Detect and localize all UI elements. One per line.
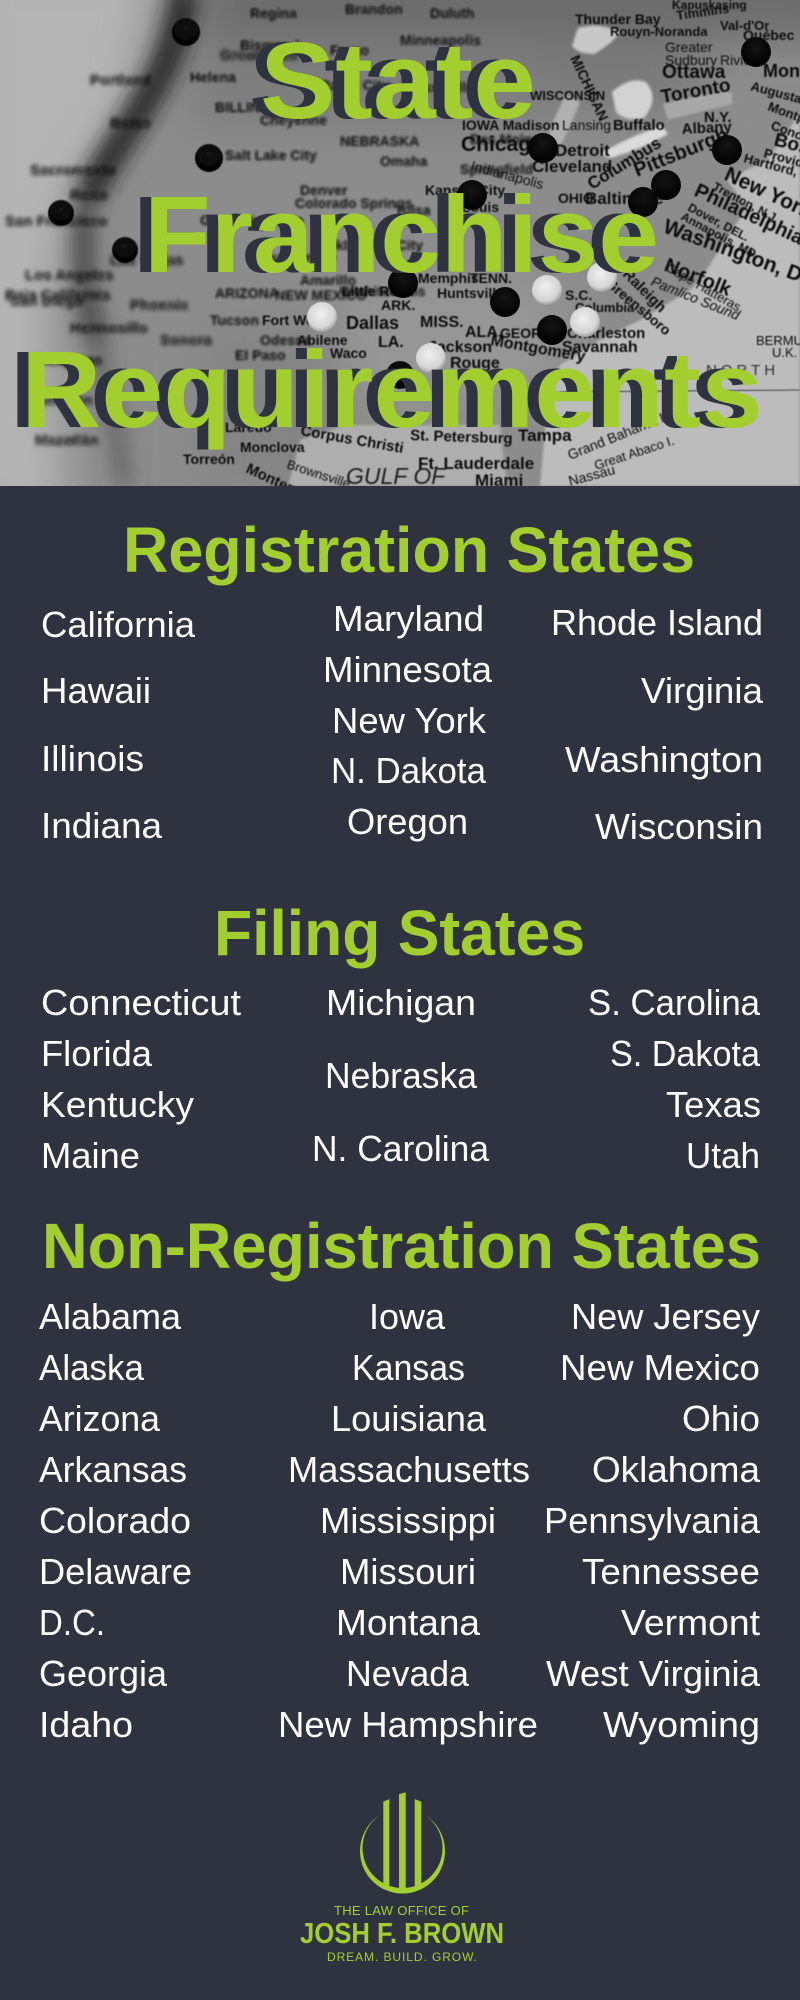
- list: non-registration middle column: Massachusetts: [288, 1449, 530, 1490]
- title: State: [249, 20, 525, 142]
- panel: header map photo: ARIZONA: [215, 285, 279, 301]
- map labels: mid: Great Abaco I.: [592, 433, 676, 473]
- panel: header map photo: Des Moines: [470, 131, 548, 147]
- title: Requirements: [10, 329, 752, 451]
- panel: filing states: [41, 897, 761, 1176]
- list: non-registration right column: Vermont: [621, 1602, 760, 1643]
- list: non-registration right column: Ohio: [682, 1398, 760, 1439]
- list: non-registration right column: New Jersey: [571, 1296, 760, 1337]
- map labels: sharp north-east: Annapolis, MD.: [679, 209, 762, 262]
- map labels: far blurred west: Sonora: [160, 332, 212, 349]
- panel: header map photo: Rapid City: [320, 77, 389, 93]
- map labels: sharp north-east: Greater: [665, 39, 713, 55]
- list: non-registration right column: New Mexico: [560, 1347, 760, 1388]
- list: registration right column: [551, 602, 764, 847]
- map labels: mid: U.K.: [772, 345, 797, 360]
- map labels: sharp north-east: Val-d'Or: [720, 18, 769, 33]
- list: non-registration right column: Pennsylvania: [544, 1500, 761, 1541]
- map labels: mid: Monclova: [240, 439, 305, 455]
- icon: circle with three towers: [360, 1792, 445, 1894]
- map labels: mid: Charleston: [567, 325, 645, 342]
- map labels: mid: Waco: [330, 345, 367, 361]
- list: non-registration left column: Georgia: [39, 1653, 168, 1694]
- map labels: far blurred west: Phoenix: [130, 297, 189, 314]
- list: non-registration middle column: Nevada: [346, 1653, 470, 1694]
- map labels: sharp north-east: Rouyn-Noranda: [610, 24, 708, 39]
- list: registration left column: Hawaii: [41, 670, 151, 711]
- panel: header map photo: Bismarck: [240, 37, 303, 53]
- map labels: sharp north-east: Lansing: [562, 117, 611, 133]
- list: filing left column: Connecticut: [41, 982, 241, 1023]
- list: filing right column: S. Dakota: [610, 1033, 761, 1074]
- map labels: sharp north-east: Québec: [743, 27, 795, 43]
- panel: header map photo: Helena: [190, 69, 236, 85]
- panel: header map photo: BILLINGS: [215, 99, 280, 115]
- map labels: mid: Chicago: [461, 133, 544, 156]
- list: non-registration left column: Idaho: [39, 1704, 133, 1745]
- panel: header map photo: Grand Junction: [200, 212, 303, 228]
- map labels: sharp north-east: Toronto: [659, 75, 732, 108]
- list: filing left column: Florida: [41, 1033, 153, 1074]
- map labels: mid: OHIO: [558, 190, 594, 206]
- map labels: far blurred west: Guaymas: [35, 352, 103, 369]
- map labels: mid: Grand Bahama I.: [565, 408, 670, 463]
- list: filing left column: Maine: [41, 1135, 140, 1176]
- map labels: sharp north-east: WISCONSIN: [530, 88, 605, 103]
- map labels: mid: Pamlico Sound: [649, 273, 743, 324]
- map labels: sharp north-east: Detroit: [555, 141, 610, 160]
- map labels: mid: [183, 117, 800, 507]
- map labels: far blurred west: Hermosillo: [70, 320, 148, 337]
- ocean and gulf: [288, 113, 800, 486]
- list: non-registration middle column: Iowa: [369, 1296, 446, 1337]
- map labels: mid: Miami: [475, 471, 523, 490]
- list: registration middle column: N. Dakota: [331, 750, 487, 791]
- map labels: far blurred west: Boise: [110, 115, 151, 132]
- list: registration right column: Wisconsin: [595, 806, 763, 847]
- map labels: mid: ARK.: [381, 297, 415, 313]
- map labels: mid: Greensboro: [603, 275, 674, 338]
- list: non-registration left column: Alaska: [39, 1347, 145, 1388]
- list: filing right column: Texas: [666, 1084, 761, 1125]
- map labels: mid: LA.: [378, 334, 404, 351]
- logo text: [300, 1903, 504, 1964]
- icon: black map pins: [48, 18, 771, 389]
- map labels: mid: Columbia: [575, 300, 635, 315]
- map labels: far blurred west: Baja California: [5, 287, 111, 304]
- map labels: sharp north-east: Cleveland: [532, 157, 612, 176]
- list: registration middle column: Oregon: [347, 801, 468, 842]
- list: registration right column: Virginia: [641, 670, 764, 711]
- list: filing middle column: Michigan: [326, 982, 476, 1023]
- logo text: DREAM. BUILD. GROW.: [327, 1950, 477, 1964]
- map labels: mid: Raleigh: [619, 266, 670, 316]
- map labels: sharp north-east: Sudbury: [665, 52, 717, 68]
- list: registration left column: Illinois: [41, 738, 144, 779]
- list: non-registration left column: Colorado: [39, 1500, 191, 1541]
- panel: header map photo: Colorado Springs: [295, 195, 413, 211]
- map labels: sharp north-east: Rivière: [720, 52, 764, 68]
- panel: header map photo: Duluth: [430, 5, 474, 21]
- map labels: mid: Little Rock: [342, 283, 414, 299]
- panel: header map photo: El Paso: [235, 347, 286, 363]
- panel: header map photo: Fargo: [330, 42, 369, 58]
- list: non-registration right column: West Virginia: [546, 1653, 761, 1694]
- list: registration left column: Indiana: [41, 805, 163, 846]
- panel: header map photo: NEW MEXICO: [275, 287, 367, 303]
- list: non-registration left column: Delaware: [39, 1551, 192, 1592]
- map labels: sharp north-east: [530, 0, 800, 301]
- map labels: far blurred west: San Francisco: [5, 213, 108, 230]
- list: non-registration middle column: [278, 1296, 538, 1745]
- map labels: mid: GULF OF: [346, 463, 447, 489]
- map labels: mid: Corpus Christi: [299, 422, 405, 457]
- map labels: sharp north-east: MICHIGAN: [567, 53, 612, 123]
- list: registration left column: California: [41, 604, 196, 645]
- list: non-registration left column: [39, 1296, 192, 1745]
- map labels: sharp north-east: Dover, DEL.: [686, 200, 752, 244]
- title: Franchise: [144, 174, 659, 296]
- list: filing middle column: N. Carolina: [312, 1128, 490, 1169]
- map labels: mid: Ft. Lauderdale: [418, 454, 534, 473]
- logo text: JOSH F. BROWN: [300, 1918, 504, 1950]
- list: non-registration left column: D.C.: [39, 1602, 105, 1643]
- map labels: sharp north-east: Columbus: [584, 133, 665, 193]
- list: registration middle column: New York: [332, 700, 487, 741]
- map labels: sharp north-east: Pittsburgh: [631, 124, 732, 182]
- panel: header map photo: Wichita Falls: [340, 283, 426, 299]
- map labels: far blurred west: Las Vegas: [110, 252, 183, 269]
- panel: header map photo: Oklahoma City: [325, 237, 423, 253]
- map labels: mid: IOWA Madison: [462, 117, 559, 133]
- panel: header map photo: Minneapolis: [400, 32, 481, 48]
- list: filing middle column: Nebraska: [325, 1055, 478, 1096]
- map labels: far blurred west: Portland: [90, 72, 151, 89]
- title: Requirements: [21, 329, 763, 451]
- map labels: mid: NORTH: [706, 362, 779, 379]
- map labels: mid: Kansas City: [425, 182, 505, 198]
- map labels: sharp north-east: Trenton, N.J.: [711, 179, 781, 226]
- map labels: far blurred west: Los Angeles: [25, 267, 114, 284]
- panel: header map photo: Cheyenne: [260, 112, 327, 128]
- panel: header map photo: Brandon: [345, 1, 403, 17]
- map labels: far blurred west: Sacramento: [30, 162, 116, 179]
- list: registration middle column: Minnesota: [323, 649, 493, 690]
- logo text: THE LAW OFFICE OF: [334, 1903, 469, 1918]
- map labels: far blurred west: San Diego: [10, 293, 83, 310]
- panel: header map photo: Albuquerque: [250, 249, 337, 265]
- map labels: mid: Laredo: [225, 419, 272, 435]
- map labels: mid: Montgomery: [489, 332, 587, 366]
- icon: white map pins: [307, 262, 617, 373]
- heading: filing states: Filing States: [214, 897, 585, 969]
- panel: header map photo: Sioux Falls: [400, 79, 474, 95]
- map labels: sharp north-east: Norfolk: [661, 254, 735, 301]
- list: filing right column: [588, 982, 761, 1176]
- panel: header map photo: Tucson: [210, 312, 259, 328]
- map labels: mid: St. Petersburg: [410, 427, 513, 448]
- list: non-registration right column: Oklahoma: [592, 1449, 761, 1490]
- list: non-registration middle column: Missouri: [340, 1551, 476, 1592]
- map labels: sharp north-east: Buffalo: [613, 117, 665, 134]
- panel: registration states: [41, 514, 764, 847]
- map labels: mid: Rouge: [450, 355, 500, 372]
- panel: non-registration states: [39, 1210, 761, 1745]
- list: filing right column: S. Carolina: [588, 982, 761, 1023]
- map labels: mid: Savannah: [562, 339, 638, 356]
- map labels: mid: Cape Hatteras: [664, 260, 744, 315]
- panel: header map photo: Denver: [300, 182, 348, 198]
- map labels: mid: Brownsville: [285, 457, 352, 491]
- map labels: mid: Nassau: [567, 461, 617, 489]
- list: non-registration middle column: Montana: [336, 1602, 481, 1643]
- panel: header map photo: Regina: [250, 5, 297, 21]
- list: filing left column: Kentucky: [41, 1084, 194, 1125]
- list: non-registration middle column: Louisiana: [331, 1398, 487, 1439]
- map labels: mid: Memphis: [418, 270, 479, 286]
- map labels: mid: Jackson: [428, 339, 492, 356]
- map labels: sharp north-east: Baltimore: [585, 189, 663, 208]
- map labels: far blurred west: [5, 47, 298, 449]
- map labels: far blurred west: Culiacán: [30, 392, 93, 409]
- list: non-registration right column: Tennessee: [582, 1551, 760, 1592]
- map labels: far blurred west: Mazatlán: [35, 432, 98, 449]
- map labels: mid: Huntsville: [437, 285, 504, 301]
- map labels: mid: Monterrey: [243, 460, 317, 507]
- map labels: mid: St. Louis: [440, 199, 499, 215]
- panel: header map photo: Amarillo: [300, 272, 356, 288]
- map labels: mid: ALA.: [465, 324, 502, 341]
- panel: header map photo: Springfield: [460, 161, 533, 177]
- list: non-registration right column: [544, 1296, 761, 1745]
- list: non-registration middle column: Mississippi: [320, 1500, 496, 1541]
- map labels: mid: MISS.: [420, 314, 464, 331]
- list: non-registration left column: Arkansas: [39, 1449, 187, 1490]
- map labels: mid: Dallas: [346, 313, 399, 333]
- list: registration left column: [41, 604, 196, 846]
- map labels: mid: GEORGIA: [500, 325, 566, 341]
- map labels: mid: TENN.: [470, 270, 512, 286]
- list: filing right column: Utah: [686, 1135, 760, 1176]
- map labels: sharp north-east: N.Y.: [704, 109, 732, 126]
- panel: header map photo: Odessa: [260, 332, 311, 348]
- list: non-registration right column: Wyoming: [603, 1704, 760, 1745]
- list: non-registration left column: Alabama: [39, 1296, 182, 1337]
- list: registration right column: Rhode Island: [551, 602, 763, 643]
- panel: header map photo: Omaha: [380, 153, 428, 169]
- title: [10, 20, 763, 451]
- map labels: mid: Torreón: [183, 451, 235, 467]
- heading: registration states: Registration States: [123, 514, 695, 586]
- map labels: mid: S.C.: [565, 287, 592, 303]
- list: non-registration middle column: New Hampshire: [278, 1704, 538, 1745]
- list: filing middle column: [312, 982, 490, 1169]
- map labels: sharp north-east: Albany: [681, 118, 733, 138]
- map labels: sharp north-east: Ottawa: [662, 62, 726, 83]
- title: State: [260, 20, 536, 142]
- list: registration middle column: [323, 598, 493, 842]
- map labels: far blurred west: Great Falls: [220, 47, 298, 64]
- list: non-registration left column: Arizona: [39, 1398, 161, 1439]
- heading: non-registration states: Non-Registration States: [42, 1210, 761, 1282]
- map labels: mid: Abilene: [297, 332, 348, 348]
- title: Franchise: [133, 174, 648, 296]
- panel: header map photo: NEBRASKA: [340, 133, 419, 149]
- map labels: sharp north-east: Timmins: [675, 1, 730, 23]
- map labels: mid: Fort Worth: [262, 312, 333, 328]
- list: registration right column: Washington: [565, 739, 763, 780]
- list: registration middle column: Maryland: [333, 598, 484, 639]
- list: non-registration middle column: Kansas: [352, 1347, 465, 1388]
- great lakes: [546, 26, 732, 158]
- panel: header map photo: Tulsa: [395, 202, 431, 218]
- map labels: mid: Tampa: [518, 426, 572, 445]
- logo: The Law Office of Josh F. Brown: [300, 1792, 504, 1964]
- panel: header map photo: Salt Lake City: [225, 147, 317, 163]
- map labels: mid: Indianapolis: [469, 157, 546, 192]
- map labels: sharp north-east: Thunder Bay: [575, 11, 661, 27]
- map labels: far blurred west: Reno: [70, 187, 108, 204]
- list: filing left column: [41, 982, 241, 1176]
- panel: header map photo: [0, 0, 800, 526]
